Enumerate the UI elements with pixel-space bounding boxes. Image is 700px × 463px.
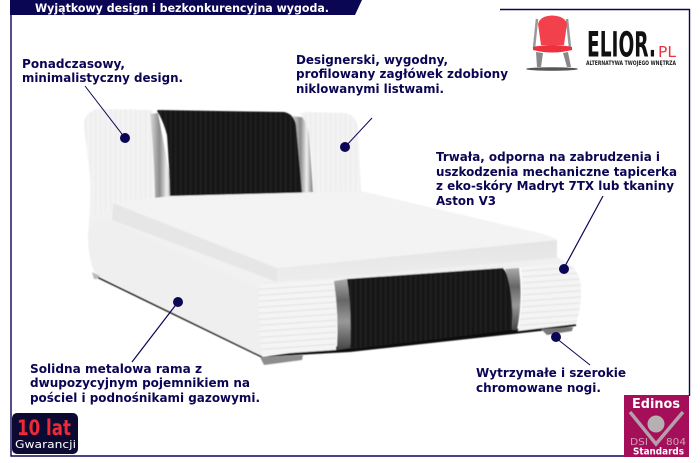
callout: frame [30, 297, 260, 405]
area below mattress [265, 257, 570, 286]
callout: frame: dwupozycyjnym pojemnikiem na [30, 376, 250, 390]
side rail face [88, 220, 262, 355]
callout: headboard: niklowanymi listwami. [296, 82, 444, 96]
footboard right block [518, 263, 581, 331]
badge: Edinos standards: 804 [666, 437, 686, 448]
headboard black panel [157, 110, 302, 197]
callout: upholstery: Trwała, odporna na zabrudzenia i [436, 150, 660, 164]
headboard left chrome [150, 113, 174, 198]
callout: legs [476, 332, 626, 395]
callout: headboard [296, 53, 508, 152]
badge: Edinos standards: Edinos [632, 397, 680, 412]
mattress front face [277, 240, 557, 282]
icon: red chair [526, 16, 578, 71]
headboard right cushion [300, 112, 361, 193]
badge: Edinos standards [624, 395, 689, 458]
callout: upholstery: uszkodzenia mechaniczne tapicerka [436, 165, 677, 179]
callout: frame: Solidna metalowa rama z [30, 362, 202, 376]
badge: 10 years warranty: 10 lat [17, 416, 71, 440]
logo domain: PL [658, 43, 677, 61]
callout: upholstery: Aston V3 [436, 194, 496, 208]
title banner: Wyjątkowy design i bezkonkurencyjna wygoda. [35, 1, 329, 15]
footboard left block [258, 280, 337, 355]
side frame [84, 109, 300, 356]
headboard left cushion [84, 109, 156, 215]
callout: frame: pościel i podnośnikami gazowymi. [30, 391, 260, 405]
callout: headboard: Designerski, wygodny, [296, 53, 448, 67]
callout: headboard: profilowany zagłówek zdobiony [296, 67, 508, 81]
footboard left chrome [334, 279, 351, 350]
bed [84, 109, 581, 365]
mattress top [113, 191, 557, 268]
callout: upholstery [436, 150, 677, 274]
callout: legs: chromowane nogi. [476, 381, 601, 395]
footboard right chrome [505, 268, 521, 330]
headboard right chrome [292, 116, 313, 193]
badge: Edinos standards: Standards [633, 446, 684, 458]
mattress left side [112, 203, 277, 282]
callout: minimal design: Ponadczasowy, [22, 57, 125, 71]
callout: upholstery: z eko-skóry Madryt 7TX lub tkaniny [436, 179, 674, 193]
bed legs [92, 272, 573, 365]
badge: Edinos standards: DSI [630, 437, 648, 448]
badge: 10 years warranty: Gwarancji [15, 438, 76, 451]
callout: minimal design [22, 57, 183, 143]
shadow under bed [97, 277, 576, 357]
badge: 10 years warranty [12, 413, 78, 454]
callout: legs: Wytrzymałe i szerokie [476, 366, 626, 380]
logo: Elior [526, 16, 677, 71]
callout: minimal design: minimalistyczny design. [22, 71, 183, 85]
footboard black panel [347, 268, 513, 349]
